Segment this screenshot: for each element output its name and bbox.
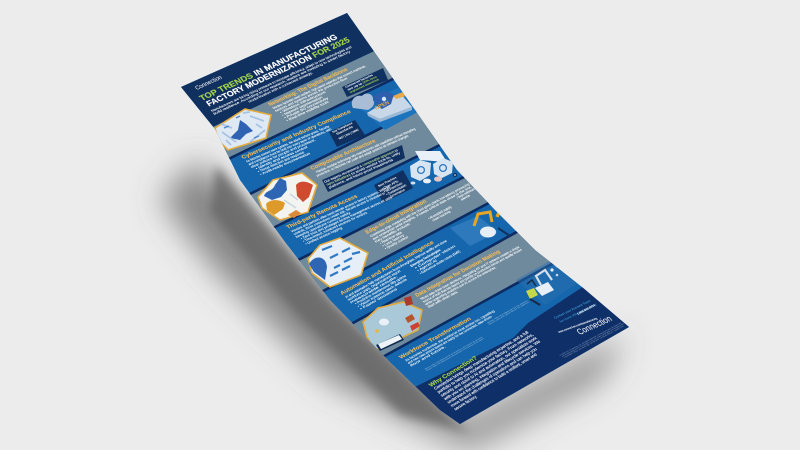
illustration: networking hexagon bbox=[215, 109, 271, 150]
heading: Data Integration for Decision Making bbox=[414, 249, 502, 298]
icon: cloud network platform: OPEN bbox=[374, 100, 391, 112]
body text: move forward with confidence to build a resilient, smart and bbox=[449, 352, 538, 408]
body text: Key benefits include: bbox=[374, 222, 412, 244]
body text: As factories connect more systems, the attack surface grows. Security bbox=[245, 125, 331, 163]
footer call to action: for more information today bbox=[559, 303, 598, 323]
body text: • AI-enabled supply bbox=[427, 205, 453, 220]
heading: Cybersecurity and Industry Compliance bbox=[241, 109, 353, 161]
source notes: Source notes and references for the statistics in this section of the report bbox=[425, 337, 485, 372]
body text: • Private 5G connectivity bbox=[283, 96, 330, 120]
body text: sensors and systems across the production floor. bbox=[274, 76, 349, 113]
section: workforce transformation bbox=[398, 289, 537, 377]
logo: Connection header: Connection bbox=[194, 74, 224, 92]
callout: our experts: new initiatives to avoid vendor lock-in, unify bbox=[325, 151, 401, 187]
body text: Connection brings deep manufacturing expertise, and a full bbox=[433, 330, 530, 391]
intro text: Manufacturers are facing rising pressure to increase efficiency, adapt to new technologies and bbox=[210, 45, 353, 113]
section: automation and artificial intelligence bbox=[340, 240, 460, 310]
body text: As factories modernize, the workforce must evolve too. Upskilling bbox=[404, 309, 496, 362]
body text: measurable results: bbox=[349, 275, 399, 304]
source notes: Source notes and references for the statistics in this section of the report bbox=[424, 336, 484, 370]
body text: security and cloud to AI and automation, our specialists work bbox=[439, 335, 539, 398]
body text: alerts bbox=[460, 194, 471, 201]
body text: • Faster decisions bbox=[359, 287, 399, 311]
callout: key compliance standards bbox=[329, 120, 365, 147]
body text: source of truth that lets teams act quickly on production trends and quality issues bbox=[422, 248, 523, 304]
contact phone and url bbox=[556, 303, 598, 334]
icon: yellow robot arm bbox=[450, 210, 510, 246]
body text bbox=[433, 329, 552, 411]
body text: • Predictive maintenance lifts uptime bbox=[354, 274, 407, 305]
body text: Modern factories need resilient, high-speed networks that connect machines, bbox=[272, 64, 367, 110]
callout: best practices: Best Practices bbox=[377, 176, 398, 188]
callout: networking box: Connected factories bbox=[344, 73, 374, 89]
body text: and enterprise-wide insights. It keeps critical data close to the line. bbox=[372, 185, 473, 241]
body text: Combining edge computing with the cloud gives plants low-latency processing bbox=[369, 182, 470, 238]
body text: • Unified access logging bbox=[304, 226, 343, 246]
body text: • Identity and access control bbox=[255, 145, 309, 171]
callout: networking box: see up to 30% less bbox=[346, 75, 378, 91]
body text: production, so factories can scale and adapt systems as demand changes bbox=[315, 134, 410, 177]
body text: Siloed data slows down decisions. Integrating OT and IT systems creates a single bbox=[419, 245, 521, 301]
intro text: build resilience. According to our research, leaders are investing in smart factory bbox=[212, 50, 351, 116]
illustration: edge hexagon bbox=[308, 238, 368, 287]
section: data integration bbox=[414, 246, 522, 308]
body text: • Smart maintenance bbox=[456, 186, 478, 200]
title: FACTORY MODERNIZATION FOR 2025 bbox=[204, 35, 352, 108]
callout: key compliance standards: NIST | ISO | CMMC bbox=[338, 127, 361, 140]
callout: key compliance standards: Standards bbox=[335, 125, 354, 136]
body text: keeping operations running safely. bbox=[295, 211, 352, 239]
body text: chain tracking bbox=[431, 210, 452, 222]
body text: Vendors and partners often need remote access to factory systems. Without bbox=[290, 185, 391, 233]
icon: security shields bbox=[410, 151, 457, 184]
heading: Why Connection? bbox=[428, 355, 479, 388]
poster drop shadow bbox=[160, 160, 625, 450]
heading: Third-party Remote Access bbox=[285, 194, 359, 231]
body text: secure factory. bbox=[453, 394, 478, 411]
body text: and new roles ensure teams are ready for the connected, data-driven bbox=[407, 315, 493, 365]
legal text: © 2025 PC Connection, Inc. All rights reserved. Connection® and we solve IT® bbox=[559, 321, 623, 357]
section: edge-to-cloud integration bbox=[364, 183, 476, 249]
band: edge-to-cloud integration bbox=[299, 178, 488, 290]
body text: • Audit-ready documentation bbox=[259, 152, 311, 176]
body text: • Quality control bbox=[384, 235, 409, 251]
source notes: Source notes and references for the statistics bbox=[486, 299, 529, 324]
header panel bbox=[181, 13, 374, 127]
legal text: remain the property of their respective owners. bbox=[563, 324, 626, 359]
body text: workforce gaps. Organizations report bbox=[347, 269, 402, 302]
body text: • Zero trust and privileged access management across all sites bbox=[300, 196, 394, 240]
heading: Edge-to-cloud Integration bbox=[364, 199, 429, 236]
body text: • Network segmentation bbox=[281, 95, 324, 117]
section: why connection bbox=[428, 325, 552, 412]
source notes bbox=[417, 299, 537, 372]
body text: • Time-limited, monitored sessions for vendors bbox=[302, 211, 368, 243]
body text: • Agentic AI bbox=[416, 259, 438, 273]
logo: Connection footer: Connection bbox=[575, 314, 615, 337]
body text: understand the challenges of operations and can help you bbox=[446, 346, 538, 404]
body text: Flexible, modular technology lets manufacturers add capabilities without disrupting bbox=[315, 127, 416, 174]
intro text: modernization with a connected strategy. bbox=[247, 71, 314, 104]
body text: • Computer vision bbox=[414, 244, 457, 270]
body text: • Autonomous mobile robots (AMR) bbox=[419, 250, 461, 275]
illustration: composable hexagon bbox=[258, 173, 317, 220]
section: composable architecture bbox=[310, 128, 416, 178]
source notes: Source notes and references for the statistics bbox=[488, 301, 530, 326]
callout: best practices: • Containerization bbox=[385, 183, 407, 196]
body text: Emerging Technologies bbox=[409, 248, 442, 268]
heading: Composable Architecture bbox=[310, 139, 377, 172]
callout: best practices: • Microservices bbox=[383, 181, 404, 194]
body text: with you on planning, integration and lifecycle services. We bbox=[443, 339, 542, 401]
body text: • Vision systems catch defects bbox=[356, 278, 408, 308]
callout: best practices bbox=[374, 170, 413, 203]
icon: cloud network platform bbox=[352, 87, 417, 130]
body text: while supporting analytics and AI across the enterprise. bbox=[424, 266, 497, 306]
body text: and compliance must be built into every layer of operations, with bbox=[247, 127, 333, 166]
heading: Workforce Transformation bbox=[398, 316, 473, 360]
band: data integration bbox=[354, 232, 552, 356]
body text bbox=[272, 66, 366, 121]
heading: Automation and Artificial Intelligence bbox=[339, 240, 436, 296]
callout: our experts bbox=[322, 145, 405, 192]
heading: Networking: The Digital Backbone bbox=[267, 67, 349, 108]
body text: • Threat detection and response bbox=[257, 150, 305, 173]
callout: networking box bbox=[342, 68, 388, 97]
band: composable architecture bbox=[250, 112, 440, 226]
poster bbox=[181, 13, 629, 424]
legal text: are trademarks of PC Connection, Inc. All other copyrights and trademarks bbox=[561, 322, 625, 358]
body text: Start with clean data. bbox=[427, 290, 459, 309]
body text: • Real-time data bbox=[379, 231, 403, 245]
contact phone and url: 1.800.800.0014 bbox=[576, 303, 596, 316]
footer call to action: Contact your Account Team bbox=[553, 299, 592, 320]
body text: floor and future. bbox=[409, 345, 447, 367]
body text: clear policies for people and processes. bbox=[250, 138, 316, 169]
footer panel bbox=[416, 287, 629, 424]
body text: • Less latency bbox=[381, 233, 405, 248]
band: networking bbox=[213, 51, 394, 158]
callout: best practices: • Open APIs bbox=[381, 179, 400, 191]
icon: robot and worker bbox=[516, 255, 585, 305]
body text: portfolio to help you modernize your factory. From networks, bbox=[436, 332, 535, 394]
callout: key compliance standards: Key Compliance bbox=[331, 121, 354, 134]
callout: our experts: platforms, and future-proof investments bbox=[328, 158, 394, 189]
section: networking bbox=[268, 66, 366, 121]
illustration: data hexagon bbox=[363, 296, 422, 351]
callout: our experts: Our experts recommend a composable approach to bbox=[323, 148, 399, 184]
body text: • Real-time visibility tools bbox=[285, 100, 330, 122]
section: cybersecurity bbox=[242, 110, 351, 175]
contact phone and url: www.connection.com/manufacturing bbox=[556, 317, 598, 334]
body text: controls, those connections create risk. Secure access is essential to bbox=[292, 191, 386, 236]
title: TOP TRENDS IN MANUFACTURING bbox=[197, 32, 339, 103]
legal text bbox=[559, 321, 626, 360]
callout: best practices: • Governance bbox=[387, 188, 406, 199]
section: third-party remote access bbox=[286, 186, 392, 244]
body text: • Wireless infrastructure bbox=[279, 90, 327, 114]
callout: networking box: unplanned downtime bbox=[348, 77, 380, 94]
body text: AI and automation help manufacturers boost throughput, improve quality and close bbox=[344, 239, 448, 299]
